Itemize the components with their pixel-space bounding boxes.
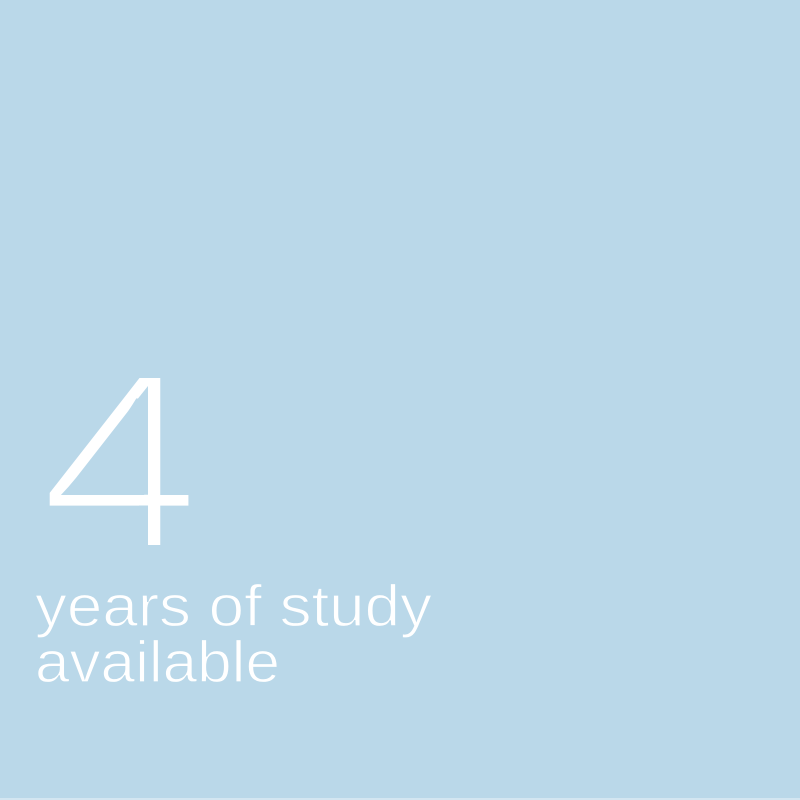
stat label: available bbox=[35, 630, 280, 695]
stat label: years of study bbox=[35, 574, 432, 639]
stat label bbox=[35, 574, 432, 695]
big number: 4 bbox=[39, 320, 201, 602]
